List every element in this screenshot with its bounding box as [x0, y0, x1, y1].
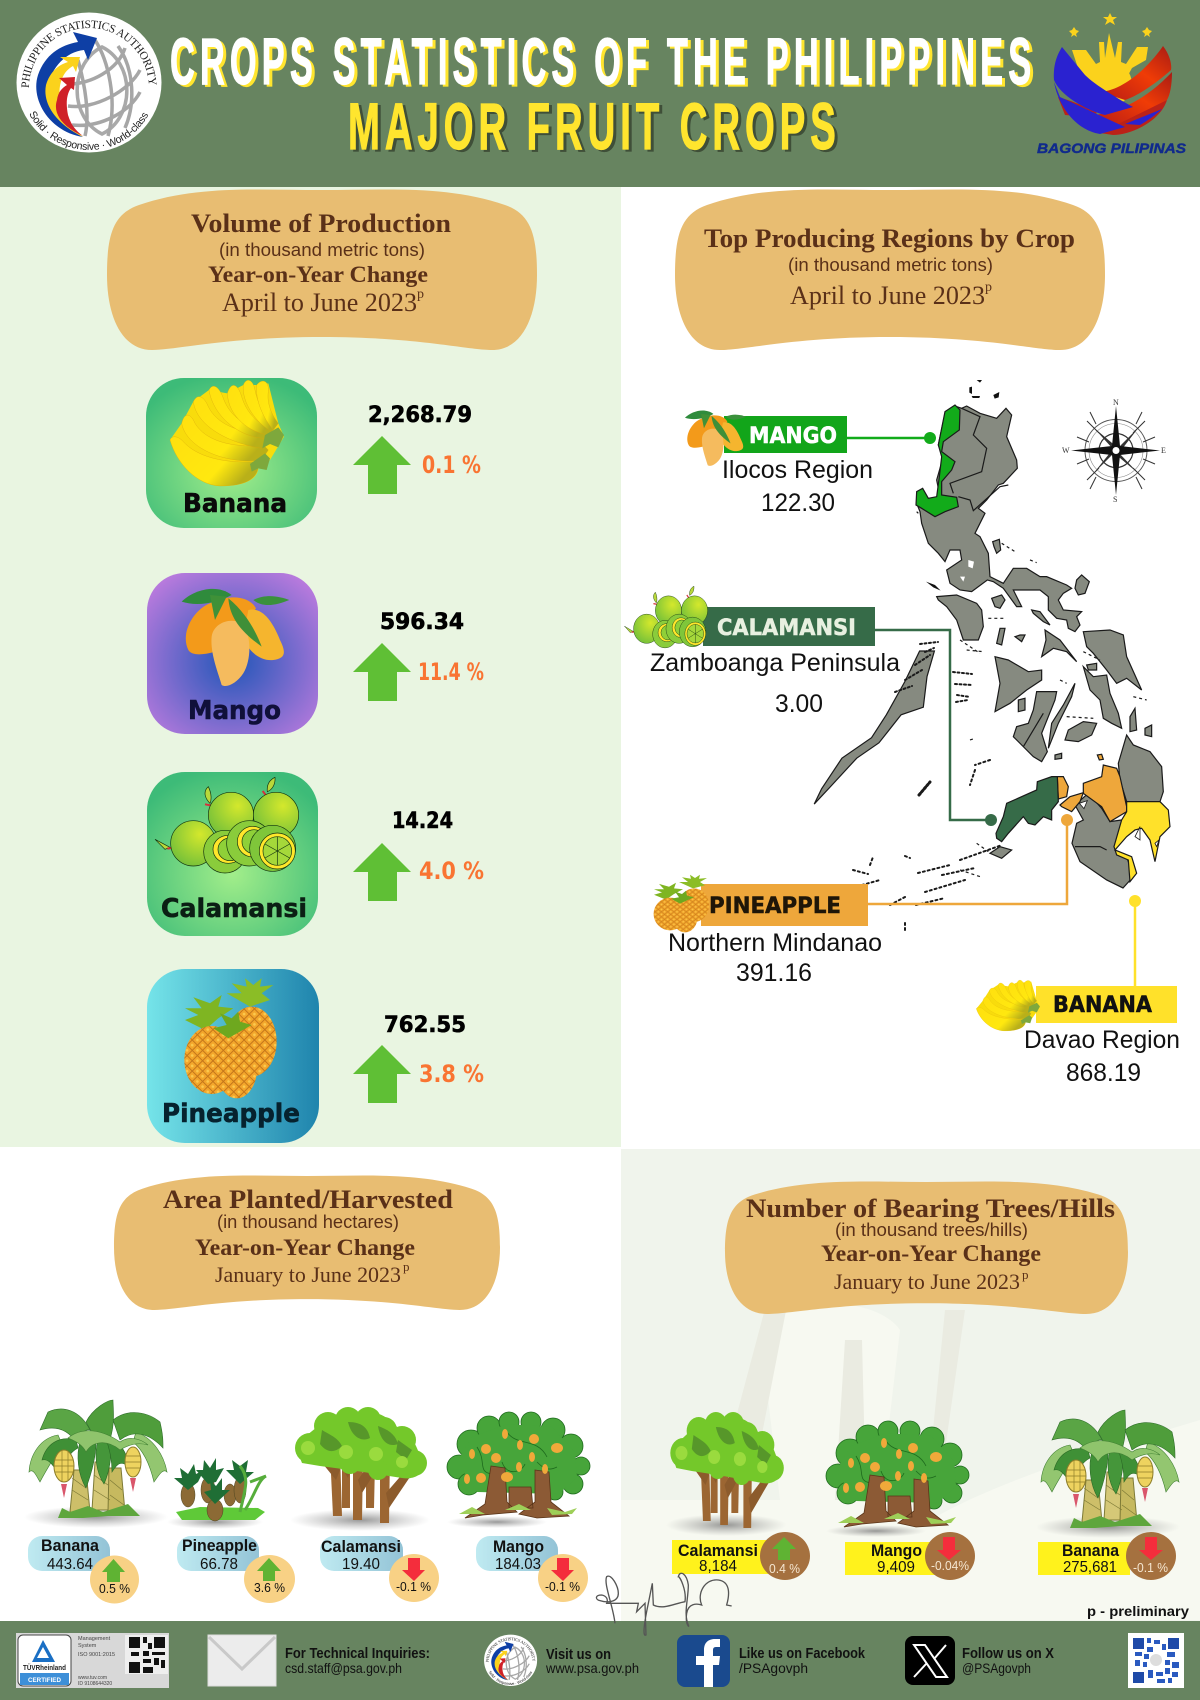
callout: pineapple, Northern Mindanao: PINEAPPLE: [709, 894, 841, 919]
compass rose: E: [1161, 446, 1166, 455]
stat: banana production: 0.1 %: [422, 451, 481, 479]
banner: top producing regions: [675, 189, 1105, 350]
banner: bearing trees: January to June 2023: [834, 1269, 1020, 1294]
logo: Philippine Statistics Authority: PHILIPPINE STATISTICS AUTHORITY: [21, 20, 157, 88]
map: Palawan and western islands: [814, 651, 934, 804]
crop: calamansi trees: 0.4 %: [769, 1561, 800, 1576]
stat: calamansi production: 14.24: [392, 809, 453, 834]
signature: [596, 1573, 732, 1635]
icon: envelope: [208, 1635, 276, 1686]
crop card: mango: Mango: [188, 696, 281, 726]
callout: mango, Ilocos Region: [685, 410, 936, 517]
banner: bearing trees: p: [1022, 1267, 1028, 1282]
header band: [0, 0, 1200, 187]
banner: volume of production: p: [417, 287, 424, 302]
map: small island specks: [853, 642, 1002, 930]
title: [170, 25, 1031, 164]
crop: pineapple plants: [167, 1458, 295, 1603]
text: website: Visit us on: [546, 1646, 611, 1663]
crop: mango trees: Mango: [493, 1537, 544, 1556]
crop: pineapple plants: 66.78: [200, 1556, 238, 1573]
stat: pineapple production: [353, 1013, 484, 1103]
text: technical inquiries: For Technical Inquiries:: [285, 1645, 430, 1662]
text: website: [545, 1646, 639, 1676]
callout: calamansi, Zamboanga Peninsula: [624, 586, 997, 826]
crop: mango trees: -0.04%: [931, 1558, 969, 1573]
banner: bearing trees: [725, 1182, 1128, 1314]
badge: ISO certification: [16, 1633, 169, 1688]
crop: mango trees: [826, 1421, 975, 1580]
stat: calamansi production: [353, 809, 484, 901]
crop card: pineapple: Pineapple: [162, 1099, 300, 1129]
badge: ISO certification: www.tuv.com: [78, 1675, 107, 1681]
banner: volume of production: Volume of Production: [191, 209, 452, 238]
text: X: @PSAgovph: [962, 1660, 1031, 1676]
banner: top producing regions: p: [985, 280, 992, 295]
callout: pineapple, Northern Mindanao: Northern Mindanao: [668, 929, 882, 957]
crop: banana plants: -0.1 %: [1133, 1560, 1168, 1575]
icon: Facebook: [677, 1635, 730, 1687]
banner: area planted: Year-on-Year Change: [195, 1235, 415, 1260]
banner: volume of production: (in thousand metric tons): [219, 240, 425, 260]
banner: bearing trees: Number of Bearing Trees/Hills: [746, 1194, 1115, 1223]
icon: X: [905, 1636, 955, 1685]
map: Visayas and Mindanao: [960, 628, 1170, 888]
crop: calamansi trees: 8,184: [699, 1558, 737, 1575]
text: X: Follow us on X: [962, 1645, 1054, 1662]
crop: banana plants: 0.5 %: [99, 1581, 130, 1596]
title: CROPS STATISTICS OF THE PHILIPPINES: [170, 25, 1031, 99]
crop: mango trees: Mango: [871, 1541, 922, 1560]
crop card: mango: [147, 573, 318, 734]
crop: calamansi trees: Calamansi: [678, 1541, 758, 1560]
badge: ISO certification: Management: [78, 1636, 111, 1642]
callout: banana, Davao Region: BANANA: [1053, 993, 1152, 1018]
stat: pineapple production: 762.55: [384, 1013, 466, 1038]
banner: top producing regions: (in thousand metric tons): [788, 255, 993, 275]
title: MAJOR FRUIT CROPS: [348, 90, 836, 164]
banner: area planted: January to June 2023: [215, 1262, 401, 1287]
crop: banana plants: 275,681: [1063, 1559, 1117, 1576]
text: X: [962, 1645, 1054, 1676]
callout: pineapple, Northern Mindanao: 391.16: [736, 959, 812, 987]
panel: area planted and harvested: [0, 1147, 621, 1621]
crop: calamansi trees: [290, 1407, 439, 1602]
crop: mango trees: 9,409: [877, 1559, 915, 1576]
QR code: [1128, 1633, 1184, 1688]
banner: top producing regions: April to June 2023: [790, 281, 985, 310]
panel: volume of production: [0, 187, 621, 1147]
callout: calamansi, Zamboanga Peninsula: CALAMANSI: [717, 616, 856, 641]
stat: calamansi production: 4.0 %: [419, 857, 484, 885]
logo: Philippine Statistics Authority: [16, 12, 162, 152]
text: technical inquiries: [285, 1645, 430, 1676]
crop: mango trees: 184.03: [495, 1556, 541, 1573]
crop: banana plants: 443.64: [47, 1556, 93, 1573]
callout: mango, Ilocos Region: Ilocos Region: [722, 456, 873, 484]
text: Facebook: /PSAgovph: [739, 1660, 808, 1676]
crop card: pineapple: [147, 969, 319, 1143]
callout: mango, Ilocos Region: 122.30: [761, 489, 835, 517]
crop: pineapple plants: Pineapple: [182, 1536, 257, 1555]
footer band: [0, 1621, 1200, 1700]
crop: banana plants: [1036, 1410, 1180, 1580]
badge: ISO certification: TÜVRheinland: [23, 1663, 66, 1672]
badge: ISO certification: CERTIFIED: [28, 1677, 61, 1684]
crop: calamansi trees: -0.1 %: [396, 1579, 431, 1594]
compass rose: [1062, 398, 1166, 504]
callout: pineapple, Northern Mindanao: [654, 814, 1073, 987]
stat: mango production: [353, 610, 484, 701]
callout: banana, Davao Region: Davao Region: [1024, 1026, 1180, 1054]
badge: ISO certification: System: [78, 1643, 97, 1649]
banner: volume of production: [107, 189, 537, 350]
crop card: calamansi: [147, 772, 318, 936]
callout: banana, Davao Region: 868.19: [1066, 1059, 1141, 1087]
callout: banana, Davao Region: [976, 895, 1180, 1087]
logo: Bagong Pilipinas: [1037, 13, 1186, 156]
banner: area planted: (in thousand hectares): [217, 1212, 399, 1232]
banner: area planted: [114, 1176, 500, 1310]
crop: mango trees: -0.1 %: [545, 1579, 580, 1594]
badge: ISO certification: ID 9108644320: [78, 1681, 112, 1687]
crop: calamansi trees: [666, 1412, 810, 1580]
stat: pineapple production: 3.8 %: [419, 1060, 484, 1088]
crop card: calamansi: Calamansi: [161, 894, 307, 924]
callout: calamansi, Zamboanga Peninsula: Zamboanga Peninsula: [650, 649, 900, 677]
crop: pineapple plants: 3.6 %: [254, 1580, 285, 1595]
crop: banana plants: [24, 1400, 168, 1604]
crop card: banana: Banana: [183, 489, 287, 519]
banner: volume of production: April to June 2023: [222, 288, 417, 317]
panel: number of bearing trees: [621, 1149, 1200, 1621]
banner: area planted: Area Planted/Harvested: [163, 1185, 454, 1214]
logo: Bagong Pilipinas: BAGONG PILIPINAS: [1037, 141, 1186, 156]
crop: calamansi trees: 19.40: [342, 1556, 380, 1573]
banner: top producing regions: Top Producing Regions by Crop: [704, 224, 1075, 253]
icon: PSA seal: [484, 1635, 537, 1686]
crop card: banana: [146, 378, 317, 528]
banner: area planted: p: [403, 1259, 410, 1274]
text: website: www.psa.gov.ph: [545, 1660, 639, 1676]
badge: ISO certification: ISO 9001:2015: [78, 1652, 115, 1658]
compass rose: S: [1113, 495, 1117, 504]
text: technical inquiries: csd.staff@psa.gov.ph: [285, 1660, 402, 1676]
banner: bearing trees: (in thousand trees/hills): [835, 1220, 1028, 1240]
compass rose: W: [1062, 446, 1070, 455]
callout: calamansi, Zamboanga Peninsula: 3.00: [775, 690, 823, 718]
crop: calamansi trees: Calamansi: [321, 1537, 401, 1556]
stat: mango production: 11.4 %: [418, 658, 484, 686]
stat: banana production: 2,268.79: [368, 403, 472, 428]
panel: top producing regions: [621, 187, 1200, 1147]
compass rose: N: [1113, 398, 1119, 407]
logo: Philippine Statistics Authority: Solid · Responsive · World-class: [30, 111, 148, 150]
stat: banana production: [353, 403, 481, 494]
crop: banana plants: Banana: [41, 1536, 100, 1555]
crop: banana plants: Banana: [1062, 1541, 1119, 1560]
banner: bearing trees: Year-on-Year Change: [821, 1241, 1041, 1266]
stat: mango production: 596.34: [380, 610, 464, 635]
text: Facebook: Like us on Facebook: [739, 1645, 866, 1662]
callout: mango, Ilocos Region: MANGO: [749, 424, 837, 449]
text: Facebook: [739, 1645, 866, 1676]
map of the Philippines: [814, 380, 1170, 930]
crop: mango trees: [447, 1412, 590, 1602]
map: Luzon: [916, 380, 1089, 640]
note: preliminary: p - preliminary: [1087, 1603, 1189, 1619]
banner: volume of production: Year-on-Year Change: [208, 262, 428, 287]
